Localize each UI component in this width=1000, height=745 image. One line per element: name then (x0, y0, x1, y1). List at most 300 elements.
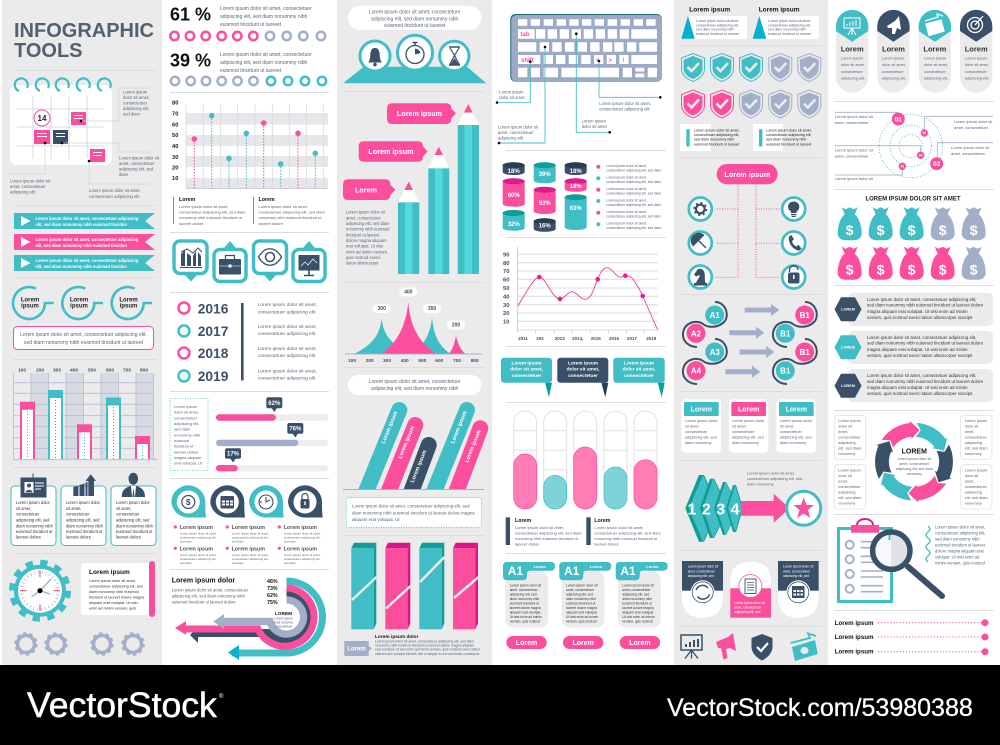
cards with icons: Lorem ipsum dolor (66, 500, 101, 505)
cylinder legend: consectetuer adipiscing elit, sed diam (606, 203, 661, 207)
calendar notes: adipiscing elit (10, 190, 36, 194)
text card: enim ad minim veniam, quis (89, 606, 136, 610)
chart notes: laoreet dolore (179, 221, 204, 226)
hexagon rows: veniam, quis nostrud exerci tation ullamcorper suscipit (867, 391, 973, 396)
icon: small gears (16, 634, 144, 654)
cylinders: 16% (539, 224, 551, 230)
A to B flow: B1 (800, 311, 810, 320)
money bags: $ (877, 222, 885, 238)
A to B flow (683, 302, 817, 384)
gauge notes: Lorem (515, 518, 531, 524)
pencil note: quis nostrud exerci (346, 255, 380, 260)
dotted note: dolor sit amet, (174, 410, 199, 415)
teardrop captions: Lorem ipsum (284, 525, 317, 531)
A1 cards: Lorem (590, 564, 603, 569)
teardrop captions (174, 525, 321, 565)
A1 cards: Lorem ipsum dolor sit (622, 584, 654, 588)
timeline years: 2019 (198, 369, 229, 384)
A1 cards: euismod tincidunt ut (510, 602, 539, 606)
numbered arrow: 4 (731, 502, 740, 518)
intro pill: Lorem ipsum dolor sit amet, consectetuer (369, 10, 461, 16)
lollipop chart: 50 (172, 133, 178, 139)
calendar notes: Lorem ipsum dolor sit (119, 156, 160, 160)
radial diagram (835, 112, 993, 181)
keyboard callouts: adipiscing elit (498, 135, 524, 140)
panel: column 5 (680, 7, 821, 661)
calendar notes: amet, consectetuer (10, 184, 46, 189)
A1 cards: adipiscing elit, sed (510, 593, 537, 597)
cycle side boxes: adipiscing (965, 490, 982, 494)
numbered arrow: consectetuer adipiscing elit, sed (747, 476, 802, 481)
radial diagram: amet, consectetuer (951, 151, 986, 156)
header cards: dolor sit amet, (924, 63, 948, 67)
progress bars: 76% (289, 426, 302, 432)
A1 cards: adipiscing elit, sed (566, 593, 593, 597)
dotted text box: Lorem ipsum dolor sit amet, consectetuer adipiscing elit, sed (352, 504, 470, 508)
cycle side boxes: amet, (965, 429, 974, 434)
arch cards: adipiscing elit, sed (734, 610, 761, 614)
progress bars (216, 397, 328, 471)
text card: tincidunt ut laoreet dolore magna (89, 596, 145, 600)
cycle side boxes: dolor sit (965, 473, 979, 478)
lorem cards: sit amet, (685, 424, 700, 428)
money bags: $ (970, 222, 978, 238)
header cards: adipiscing elit, (882, 76, 906, 80)
percent 39: Lorem ipsum dolor sit amet, consectetuer (220, 52, 312, 58)
dotted note: euismod (174, 438, 189, 443)
percent 61 (170, 4, 325, 40)
shield notes: consectetuer adipiscing elit, (694, 133, 739, 137)
pencil note: dolore magna aliquam (346, 238, 387, 243)
hexagon rows: veniam, quis nostrud exerci tation ullamcorper suscipit (867, 353, 973, 358)
dotted note: Lorem ipsum (174, 404, 198, 409)
diagonal bars: Lorem ipsum (381, 410, 399, 445)
clipboard note (926, 524, 986, 566)
lollipop chart (172, 100, 328, 188)
icon: stopwatch (406, 42, 424, 64)
teardrop captions: Lorem ipsum dolor sit amet, (284, 553, 321, 557)
header cards: adipiscing elit, (841, 76, 865, 80)
cylinder legend: Lorem ipsum dolor sit amet, (606, 198, 647, 202)
concentric arrow diagram: 62% (267, 593, 278, 599)
dotted text box: aliquam erat volutpat. Ut (352, 517, 400, 522)
icon: shield badge (752, 634, 772, 660)
concentric arrow diagram: Lorem ipsum (274, 616, 293, 620)
cycle side boxes: Lorem ipsum (965, 468, 987, 472)
keyboard callouts: Lorem ipsum (499, 90, 524, 94)
title: INFOGRAPHIC (14, 20, 154, 42)
keyboard callouts: consectetuer adipiscing elit (599, 106, 650, 112)
concentric arrow diagram: consectetuer (274, 624, 294, 628)
hexagon rows: magna aliquam erat volutpat. Ut wisi enim ad minim (867, 347, 968, 352)
percent 39: adipiscing elit, sed diam nonummy nibh (220, 60, 307, 66)
ribbons: Lorem ipsum dolor sit amet, consectetuer adipiscing (36, 258, 139, 263)
headings with triangles: consectetuer adipiscing elit, (768, 23, 811, 27)
percent 61: euismod tincidunt ut laoreet (220, 22, 282, 28)
lollipop chart: 40 (172, 144, 178, 150)
speech bubble labels: Lorem ipsum (397, 109, 442, 118)
line chart: 2011 (518, 336, 528, 341)
cycle diagram: amet, consectetuer (899, 462, 930, 466)
numbered arrow: Lorem ipsum dolor sit amet, (747, 470, 795, 476)
line chart: 40 (503, 294, 509, 300)
percent 39: euismod tincidunt ut laoreet (220, 68, 282, 74)
icon: umbrella (687, 229, 712, 254)
calendar notes: adipiscing elit, sed (119, 166, 154, 172)
cycle side boxes: nonummy (965, 500, 982, 506)
pink buttons (506, 636, 660, 649)
mountain chart: 350 (428, 306, 436, 312)
chart notes: Lorem ipsum dolor sit amet, (179, 204, 228, 209)
headings with triangles: euismod tincidunt ut laoreet (696, 32, 739, 36)
speech bubble labels: Lorem (355, 185, 377, 194)
line chart: 90 (503, 252, 509, 258)
bar chart: 100 (18, 368, 26, 374)
money bags: $ (939, 262, 947, 278)
shield notes: sed diam nonummy nibh (694, 138, 734, 142)
text card (81, 561, 155, 617)
cards with icons: adipiscing elit, sed (16, 518, 50, 522)
line chart: 2014, (572, 336, 583, 341)
text card: diam nonummy nibh euismod (89, 590, 139, 594)
cards with icons: sit amet, (16, 506, 31, 511)
teardrop captions: consectetuer adipiscing elit, (180, 536, 217, 540)
teardrop icons (171, 485, 323, 518)
mountain chart: 700 (453, 358, 461, 364)
A1 cards: veniam, quis nostrud (510, 619, 540, 623)
cylinders (503, 162, 587, 232)
keyboard callouts: Lorem ipsum dolor sit amet, (599, 101, 651, 106)
timeline years: consectetuer adipiscing elit (258, 310, 316, 316)
icon: open lock (788, 266, 800, 284)
arch cards: amet, consectetuer (783, 569, 811, 573)
hexagon rows: Lorem ipsum dolor sit amet, consectetuer adipiscing elit, (867, 373, 976, 378)
panel: column 3 (343, 6, 486, 656)
A1 cards: adipiscing elit, sed (622, 593, 650, 597)
percent 39: 39 % (170, 51, 211, 71)
lorem cards: adipiscing elit, sed (780, 434, 811, 440)
A1 cards: A1 (564, 564, 580, 578)
diagonal bars: Lorem ipsum (464, 429, 483, 464)
cards with icons: laoreet dolore (16, 535, 42, 540)
line chart: 80 (503, 261, 509, 267)
ring labels: ipsum (120, 304, 137, 310)
icon: target (968, 16, 983, 32)
calendar notes: sed diam (123, 112, 141, 116)
lorem cards: adipiscing elit, sed (732, 434, 764, 440)
concentric arrow diagram (175, 579, 323, 660)
teardrop captions: Lorem ipsum (180, 525, 213, 531)
bar chart: 300 (53, 368, 61, 374)
cycle side boxes: nonummy (965, 451, 982, 456)
cards with icons: consectetuer (66, 512, 90, 517)
lorem cards (681, 399, 816, 453)
teardrop captions: sed diam (180, 539, 192, 543)
radial diagram: amet, consectetuer (954, 125, 989, 130)
shield notes: sed diam nonummy nibh (766, 138, 806, 142)
A1 cards: amet, consectetuer (510, 588, 539, 592)
dotted leaders: Lorem ipsum (835, 649, 874, 656)
dotted leaders: Lorem ipsum (835, 620, 874, 627)
intro pill: adipiscing elit, sed diam nonummy nibh (371, 16, 459, 22)
A1 cards: A1 (508, 564, 523, 578)
cycle diagram: LOREM (902, 448, 927, 456)
timeline years: 2017 (198, 324, 229, 339)
icon: loudspeaker (887, 16, 901, 34)
timeline years: Lorem ipsum dolor sit amet, (258, 346, 317, 352)
header cards: Lorem (965, 44, 988, 54)
cylinder legend: consectetuer adipiscing elit, sed diam (606, 168, 661, 172)
lollipop chart: 70 (172, 112, 178, 118)
gauge notes: laoreet dolore (594, 542, 620, 546)
panel: column 6 (834, 10, 993, 656)
footer watermark: ® (219, 693, 224, 700)
text card: consectetuer adipiscing elit, sed (89, 584, 143, 588)
clipboard note: consectetuer adipiscing elit, (935, 530, 985, 536)
shield notes (680, 124, 812, 151)
arch cards: amet, consectetuer (734, 606, 762, 610)
headings with triangles: sed diam nonummy nibh (696, 28, 734, 32)
cylinders: 18% (570, 169, 582, 175)
concentric arrow diagram: 46% (267, 579, 278, 585)
speech bubble labels (343, 103, 456, 200)
mountain chart: 200 (366, 358, 374, 364)
calendar notes: amet, consectetuer (119, 161, 155, 166)
header cards: Lorem (841, 44, 864, 54)
arrow ring diagram text: euismod tincidunt ut laoreet dolore (172, 599, 236, 604)
cards with icons: Lorem ipsum dolor (116, 500, 151, 505)
numbered arrow: 1 (688, 502, 697, 518)
callout box: sed diam nonummy nibh euismod tincidunt ut laoreet (24, 340, 144, 346)
cycle side boxes: Lorem ipsum (838, 418, 861, 423)
lollipop chart: 10 (172, 176, 178, 182)
calendar notes: Lorem ipsum dolor sit amet, (89, 188, 141, 193)
pencil note: amet, consectetuer (346, 215, 381, 220)
header cards: Lorem ipsum (882, 56, 904, 60)
chart notes: nonummy nibh euismod tincidunt ut (258, 215, 322, 220)
ribbons: Lorem ipsum dolor sit amet, consectetuer adipiscing (36, 216, 139, 221)
gauge notes: nonummy nibh euismod tincidunt ut (594, 536, 658, 541)
concentric arrow diagram: 73% (267, 586, 278, 592)
caption with tag: erat volutpat. Ut wisi enim ad minim veniam, quis nostrud exerci tation (375, 648, 480, 652)
header cards: consectetuer (882, 70, 904, 74)
dotted note: consectetuer (174, 415, 198, 420)
timeline years: Lorem ipsum dolor sit amet, (258, 369, 317, 375)
lorem cards: Lorem (738, 406, 759, 414)
money bags: $ (908, 222, 916, 238)
numbered arrow: diam nonummy (747, 482, 774, 487)
line chart: 2015 (591, 336, 601, 341)
timeline years: consectetuer adipiscing elit (258, 376, 316, 382)
footer watermark (0, 665, 1000, 745)
teardrop captions: Lorem ipsum (232, 546, 265, 552)
flag callouts: consectetuer (624, 373, 654, 379)
caption with tag: ullamcorper suscipit lobortis nisl ut aliquip ex ea commodo consequat. (375, 652, 480, 656)
icon: briefcase (219, 256, 241, 274)
lorem cards: diam nonummy (780, 440, 806, 445)
cylinder legend: consectetuer adipiscing elit, sed diam (606, 192, 661, 196)
headings with triangles: Lorem ipsum (759, 7, 800, 14)
A1 cards: euismod tincidunt ut (622, 602, 652, 606)
cycle side boxes: elit, sed diam (838, 495, 861, 500)
calendar notes: consectetuer (123, 100, 148, 106)
teardrop captions: Lorem ipsum (284, 546, 317, 552)
radial diagram: Lorem ipsum dolor sit (835, 114, 874, 119)
ring labels: Lorem (70, 298, 88, 304)
gauge notes: consectetuer adipiscing elit, sed diam (594, 530, 661, 536)
cycle side boxes: elit, sed diam (965, 495, 988, 500)
teardrop captions: Lorem ipsum dolor sit amet, (232, 532, 269, 536)
hexagon rows: LOREM (841, 308, 855, 312)
radial diagram: amet, consectetuer (835, 120, 869, 125)
cycle side boxes: amet, (965, 478, 974, 484)
cards with icons: consectetuer (16, 512, 40, 517)
text card: Lorem ipsum dolor sit amet, (89, 579, 136, 583)
cards with icons: laoreet dolore (66, 535, 92, 540)
radial diagram: Lorem ipsum dolor sit (835, 176, 874, 181)
cards with icons: diam nonummy nibh (116, 523, 154, 528)
icon: light bulb (788, 201, 799, 217)
pencil note: nonummy nibh euismod (346, 227, 390, 232)
radial diagram: 05 (922, 131, 926, 135)
bar chart: 500 (88, 368, 96, 374)
icon: document (745, 579, 756, 594)
hexagon rows: veniam, quis nostrud exerci tation ullamcorper suscipit (867, 315, 973, 320)
cards with icons: euismod tincidunt ut (116, 529, 153, 534)
icon: dollar (182, 496, 195, 508)
cards with icons (11, 473, 156, 546)
A1 cards: laoreet dolore magna (510, 606, 541, 610)
A1 cards: Ut wisi enim ad minim (510, 615, 542, 619)
cycle side boxes: dolor sit (838, 424, 853, 428)
cycle side boxes: amet, (838, 429, 848, 434)
intro pill: euismod tincidunt ut laoreet (384, 23, 446, 29)
A1 cards: laoreet dolore magna (622, 606, 654, 610)
hexagon rows: sed diam nonummy nibh euismod tincidunt ut laoreet dolore (867, 302, 984, 308)
teardrop captions: consectetuer adipiscing elit, (180, 557, 217, 561)
icon tree: Lorem ipsum (724, 170, 771, 179)
teardrop captions: sed diam (284, 561, 296, 565)
gauge notes: laoreet dolore (515, 542, 540, 546)
radial diagram: 01 (895, 116, 902, 124)
chart notes: Lorem ipsum dolor sit amet, (258, 204, 308, 209)
header cards: Lorem ipsum (965, 56, 987, 60)
cards with icons: euismod tincidunt ut (16, 529, 53, 534)
pencil note: tincidunt ut laoreet (346, 232, 380, 237)
calendar notes: diam (119, 172, 129, 177)
caption with tag: Lorem ipsum dolor sit amet, consectetuer adipiscing elit, sed diam (375, 640, 474, 644)
line chart (503, 247, 658, 341)
diagonal bars: Lorem ipsum (450, 410, 469, 445)
chart notes: consectetuer adipiscing elit, sed diam (258, 210, 326, 214)
pink buttons: Lorem (516, 640, 537, 647)
arch cards: adipiscing elit, sed (688, 574, 714, 578)
icon: businessman (122, 473, 145, 497)
lollipop chart: 30 (172, 155, 178, 161)
caption with tag: Lorem ipsum dolor (375, 634, 419, 640)
teardrop captions: sed diam (232, 561, 244, 565)
shield notes: Lorem ipsum dolor sit amet, (766, 128, 812, 132)
money bags: $ (970, 262, 978, 278)
clipboard and magnifier (838, 519, 942, 602)
bar chart: 700 (123, 368, 131, 374)
icon: calendar page (792, 586, 804, 598)
ring labels (13, 287, 152, 319)
hexagon rows: LOREM (841, 384, 855, 388)
keyboard callouts: amet, consectetuer (498, 130, 534, 135)
footer watermark: VectorStock.com/53980388 (667, 694, 973, 722)
ribbons: elit, sed diam nonummy nibh euismod tincidun (36, 243, 127, 248)
cycle side boxes (834, 415, 992, 509)
clipboard note: minim veniam, quis nostrud (935, 560, 986, 566)
flag callouts: Lorem ipsum (511, 361, 542, 367)
cards with icons: diam nonummy nibh (16, 523, 54, 528)
icon: clock (259, 495, 273, 509)
A1 cards: Ut wisi enim ad minim (622, 615, 655, 619)
lorem cards: sit amet, (780, 424, 794, 428)
cycle side boxes: elit, sed diam (965, 446, 988, 450)
second intro pill: adipiscing elit, sed diam nonummy nibh (371, 386, 459, 392)
calendar notes: Lorem ipsum dolor sit (10, 178, 51, 184)
lorem cards: adipiscing elit, sed (685, 434, 717, 440)
dotted leaders (835, 619, 988, 656)
percent 61: Lorem ipsum dolor sit amet, consectetuer (220, 6, 312, 12)
cards with icons: Lorem ipsum dolor (16, 500, 51, 505)
panel: column 1 (10, 20, 160, 654)
numbered arrow (685, 470, 821, 542)
gauge notes: Lorem (594, 518, 611, 524)
calendar: 14 (38, 114, 47, 123)
dotted note (170, 398, 208, 470)
A1 cards: aliquam erat volutpat. (510, 610, 541, 614)
diagonal bars: Lorem ipsum (410, 449, 428, 484)
second intro pill: Lorem ipsum dolor sit amet, consectetuer (369, 379, 461, 385)
pencil chart (398, 104, 479, 274)
money bags: $ (846, 262, 854, 278)
headings with triangles (681, 7, 819, 39)
A1 cards: aliquam erat volutpat. (566, 610, 598, 614)
progress bars: 62% (268, 401, 281, 407)
text card: Lorem ipsum (89, 569, 130, 576)
A to B flow: B1 (780, 329, 791, 338)
hexagon rows: sed diam nonummy nibh euismod tincidunt ut laoreet dolore (867, 379, 984, 384)
pink buttons: Lorem (572, 640, 594, 647)
header cards: consectetuer (924, 70, 946, 74)
arrow ring diagram text: Lorem ipsum dolor (172, 578, 235, 585)
header cards: Lorem (882, 44, 905, 54)
keyboard (510, 14, 662, 82)
arrow ring diagram text: Lorem ipsum dolor sit amet, consectetuer (172, 588, 249, 592)
A1 cards: A1 (620, 564, 636, 578)
icon: money (790, 634, 818, 661)
cylinders: 39% (539, 172, 551, 178)
bar chart: 400 (70, 368, 78, 374)
arch cards: Lorem ipsum dolor sit (688, 565, 718, 569)
dotted note: laoreet dolore (174, 449, 199, 454)
lorem cards: diam nonummy (685, 440, 712, 445)
timeline years (178, 302, 317, 384)
keyboard: tab (520, 32, 530, 38)
calendar notes: consectetuer adipiscing elit (89, 194, 140, 199)
cycle diagram (861, 414, 967, 509)
A to B flow: A4 (691, 367, 702, 376)
chart notes: consectetuer adipiscing elit, sed diam (179, 210, 246, 214)
cycle side boxes: elit, sed diam (838, 446, 861, 450)
cycle diagram: nonummy (907, 472, 922, 476)
line chart: 2017 (627, 336, 638, 341)
icon: bell (368, 48, 382, 66)
mountain chart: 400 (401, 358, 409, 364)
